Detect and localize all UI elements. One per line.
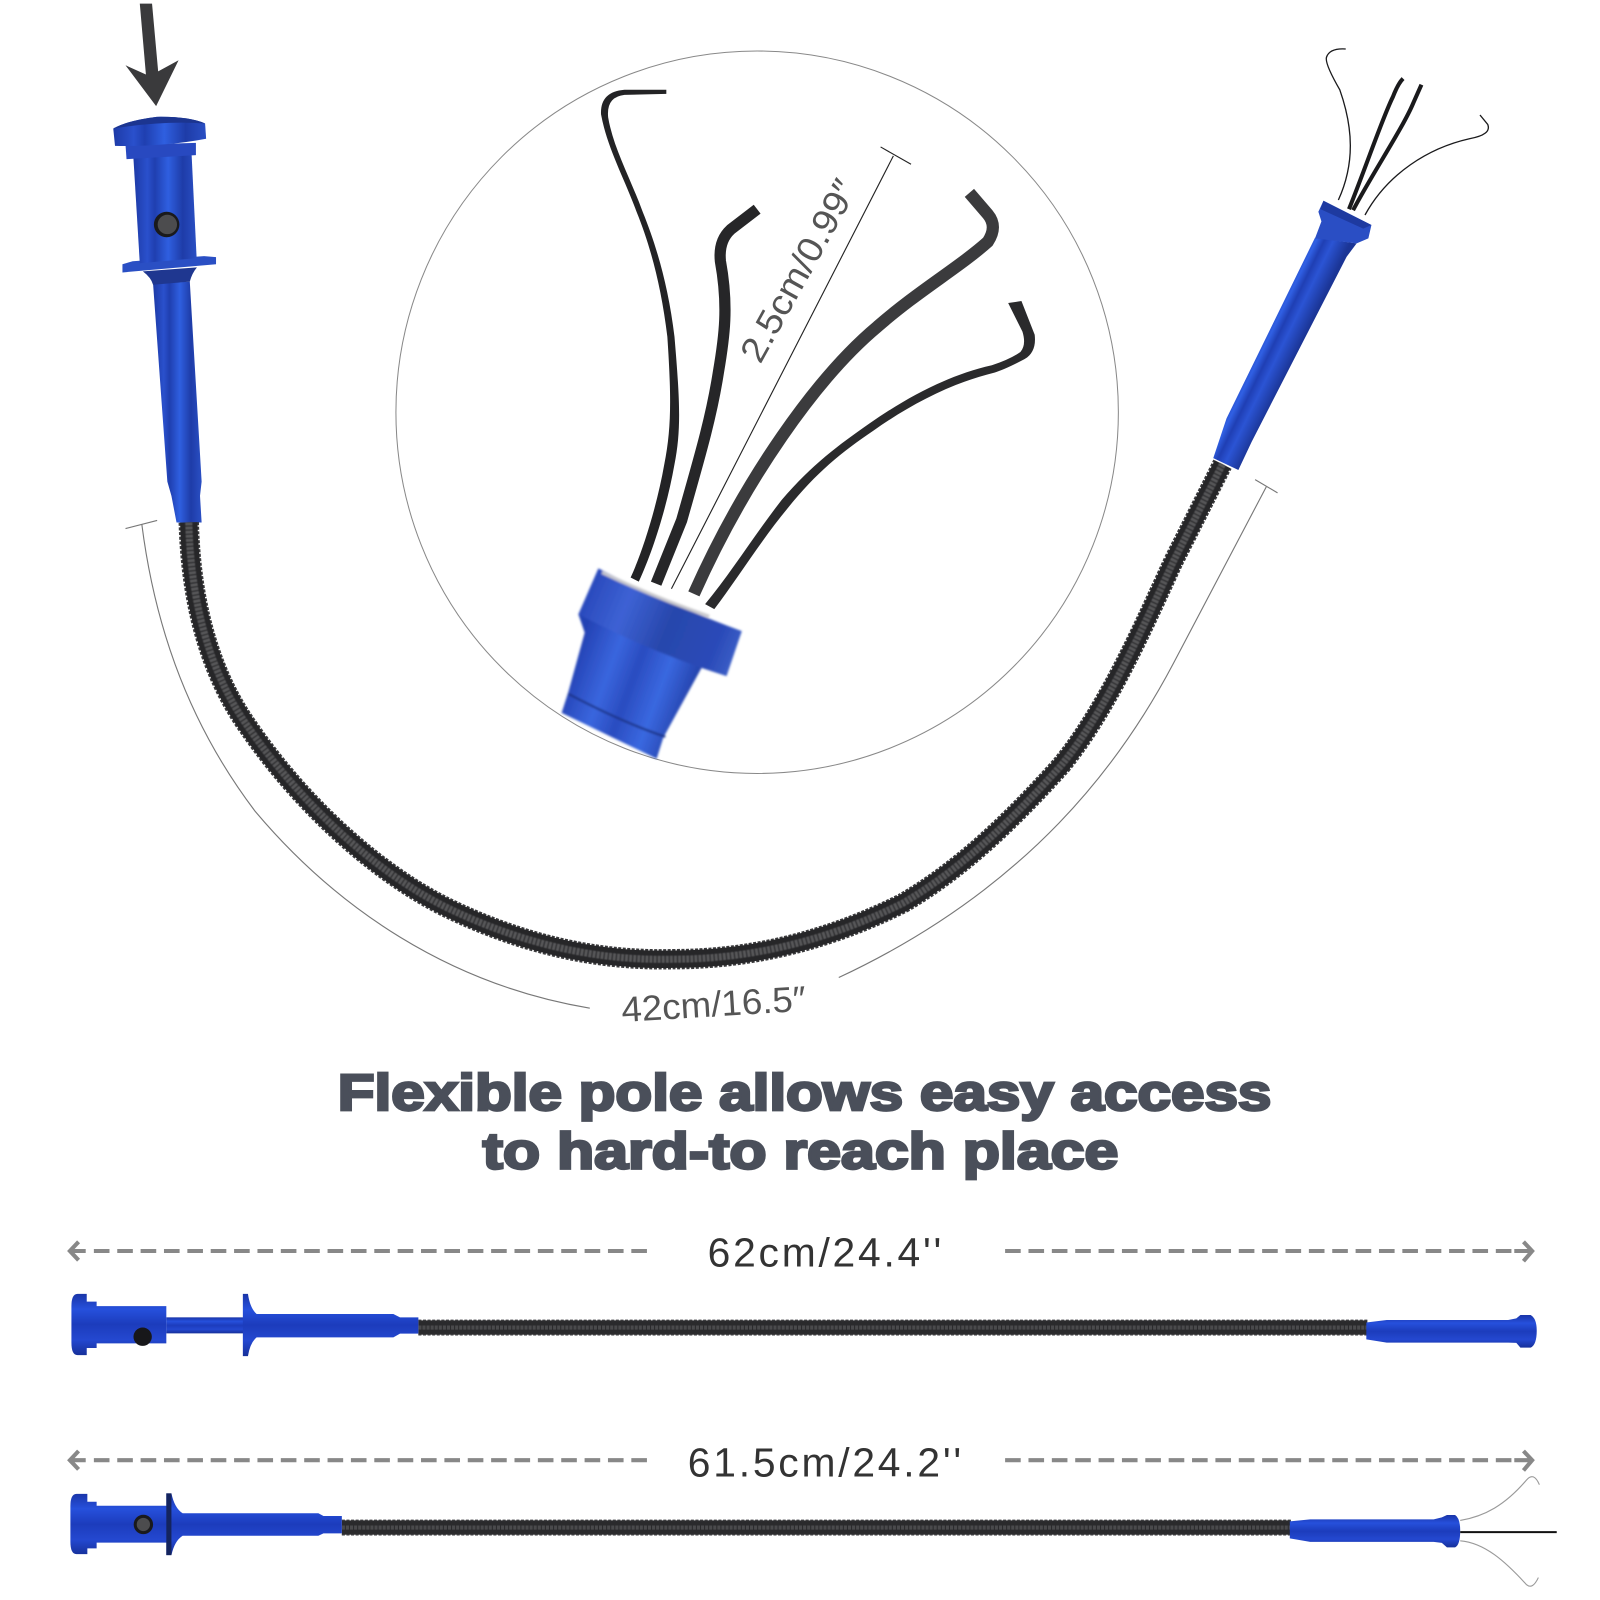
tine C (694, 193, 993, 594)
claw tines side view (1460, 1477, 1557, 1586)
blue collar (562, 568, 742, 759)
dimension arc: right (839, 480, 1278, 978)
dimension: extended length: 62cm/24.4'' (708, 1229, 941, 1275)
dimension arc: left (126, 520, 590, 1008)
title: to hard-to reach place (483, 1122, 1118, 1179)
icon: pin hole (154, 212, 179, 237)
label: pole length: 42cm/16.5″ (620, 979, 807, 1030)
dimension: extended length (70, 1229, 1532, 1275)
label: tine span: 2.5cm/0.99″ (732, 173, 865, 369)
title (338, 1064, 1271, 1179)
tine D (705, 301, 1035, 609)
head: clamp tip at far end (1213, 49, 1488, 470)
icon: pin hole (134, 1515, 153, 1534)
icon: press arrow (126, 4, 179, 106)
dimension: retracted length (70, 1440, 1532, 1486)
tool: retracted view (70, 1477, 1557, 1586)
title: Flexible pole allows easy access (338, 1064, 1271, 1121)
small claw tines (1326, 49, 1488, 215)
tool: extended view (71, 1294, 1537, 1356)
enlarged claw detail (562, 90, 1035, 759)
icon: pin hole (133, 1328, 152, 1346)
tine B (656, 209, 757, 584)
flexible pole (189, 464, 1222, 959)
tine A (601, 90, 679, 582)
dimension line: tine span (671, 147, 911, 589)
handle: plunger end of tool (113, 117, 216, 522)
dimension: retracted length: 61.5cm/24.2'' (688, 1440, 961, 1486)
magnifier circle (396, 51, 1118, 773)
